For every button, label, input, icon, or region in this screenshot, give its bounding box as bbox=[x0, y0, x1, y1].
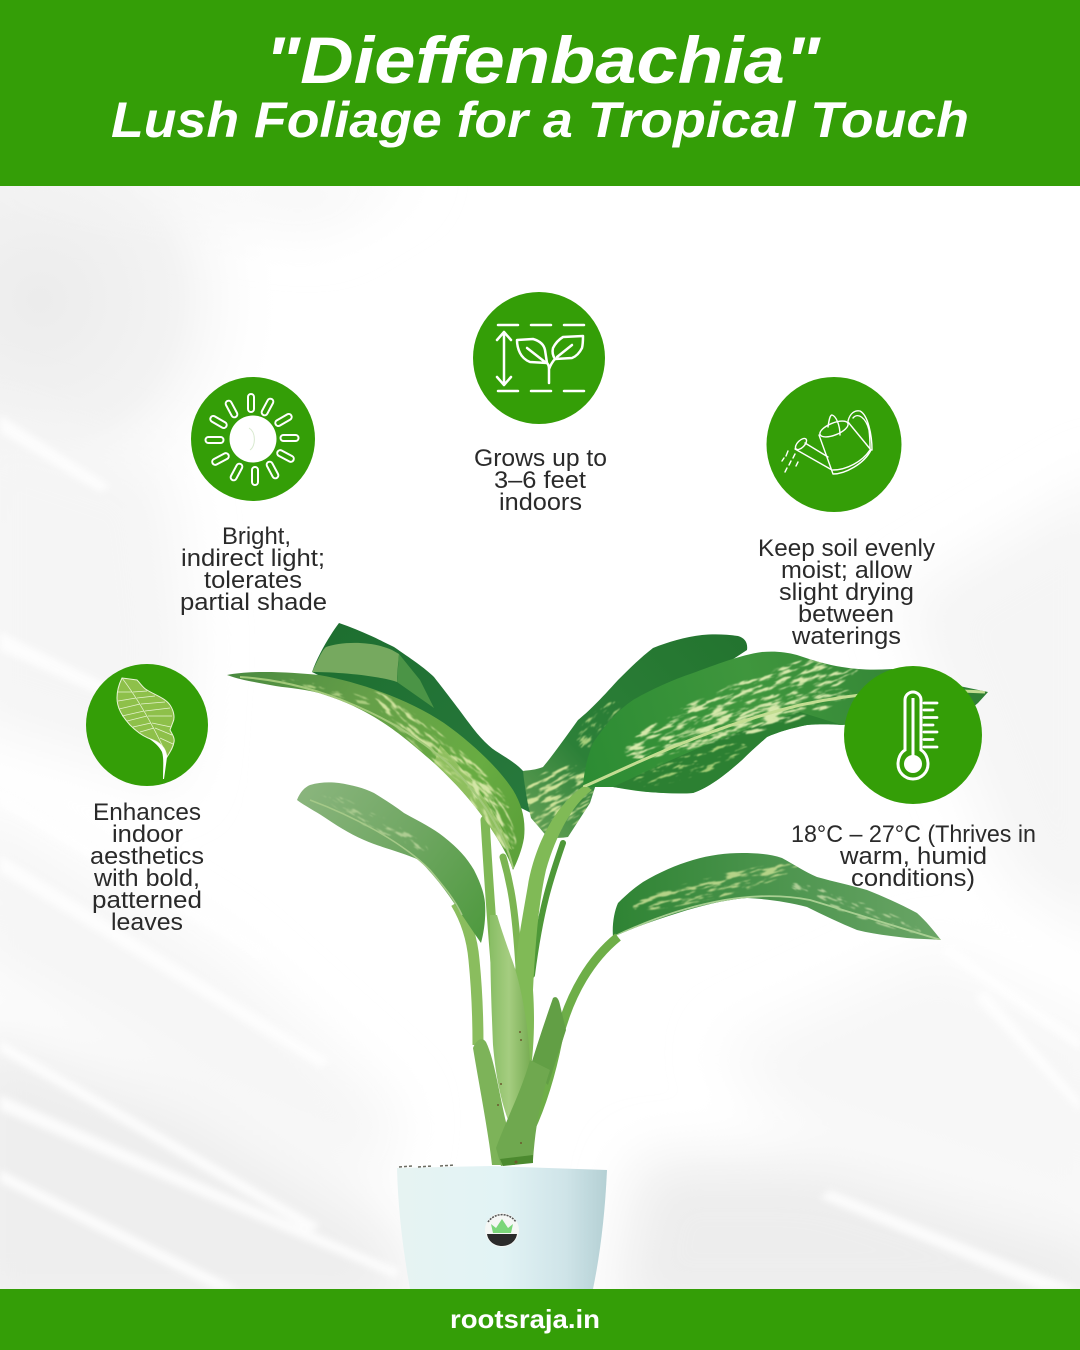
label: aesthetics: with bold, bbox=[93, 865, 200, 892]
label: height bbox=[474, 445, 607, 516]
label: light: indirect light; bbox=[181, 545, 325, 572]
title: Lush Foliage for a Tropical Touch bbox=[111, 92, 969, 148]
icon: leaf bbox=[86, 664, 208, 786]
label: watering: moist; allow bbox=[781, 557, 912, 584]
label: height: indoors bbox=[499, 489, 582, 516]
central stalk base bbox=[473, 915, 566, 1166]
label: temperature: 18°C – 27°C (Thrives in bbox=[791, 821, 1036, 848]
temperature feature: icon + label bbox=[791, 666, 1036, 892]
small lower-left leaf bbox=[297, 782, 485, 943]
large right variegated leaf bbox=[583, 652, 988, 794]
height feature: icon + label bbox=[473, 292, 607, 516]
label: temperature bbox=[791, 821, 1036, 892]
watering feature: icon + label bbox=[758, 377, 936, 650]
pot sticker logo bbox=[485, 1213, 519, 1247]
label: temperature: conditions) bbox=[851, 865, 975, 892]
stem to lower-right leaf bbox=[530, 937, 618, 1130]
small leaf stem bbox=[456, 903, 478, 1045]
label: watering bbox=[758, 535, 936, 650]
footer band bbox=[0, 1289, 1080, 1350]
label: aesthetics: leaves bbox=[111, 909, 183, 936]
plant illustration bbox=[227, 623, 988, 1289]
back dark leaf bbox=[312, 623, 533, 813]
label: light: Bright, bbox=[222, 523, 291, 550]
label: aesthetics: patterned bbox=[92, 887, 202, 914]
label: aesthetics: aesthetics bbox=[90, 843, 204, 870]
icon: thermometer bbox=[844, 666, 982, 804]
light feature: icon + label bbox=[180, 377, 327, 616]
label: aesthetics: Enhances bbox=[93, 799, 201, 826]
icon: sun bbox=[191, 377, 315, 501]
label: watering: waterings bbox=[791, 623, 901, 650]
label: height: Grows up to bbox=[474, 445, 607, 472]
label: aesthetics: indoor bbox=[112, 821, 183, 848]
title bbox=[111, 23, 969, 148]
title: "Dieffenbachia" bbox=[265, 23, 821, 97]
upper-left large leaf bbox=[227, 672, 525, 870]
label: watering: between bbox=[798, 601, 894, 628]
right back dark leaf bbox=[509, 634, 747, 844]
stems behind leaves bbox=[485, 820, 563, 985]
header band bbox=[0, 0, 1080, 186]
label: height: 3–6 feet bbox=[494, 467, 586, 494]
lower-right leaf bbox=[613, 853, 941, 940]
icon: watering can bbox=[766, 377, 902, 512]
label: light: tolerates bbox=[204, 567, 302, 594]
pot bbox=[397, 1165, 607, 1289]
label: aesthetics bbox=[90, 799, 204, 936]
icon: plant height bbox=[473, 292, 605, 424]
footer website: rootsraja.in bbox=[450, 1304, 600, 1334]
label: light: partial shade bbox=[180, 589, 327, 616]
label: temperature: warm, humid bbox=[839, 843, 987, 870]
label: light bbox=[180, 523, 327, 616]
aesthetics feature: icon + label bbox=[86, 664, 208, 936]
label: watering: Keep soil evenly bbox=[758, 535, 936, 562]
thick stem to large right leaf bbox=[514, 785, 592, 1075]
label: watering: slight drying bbox=[779, 579, 914, 606]
